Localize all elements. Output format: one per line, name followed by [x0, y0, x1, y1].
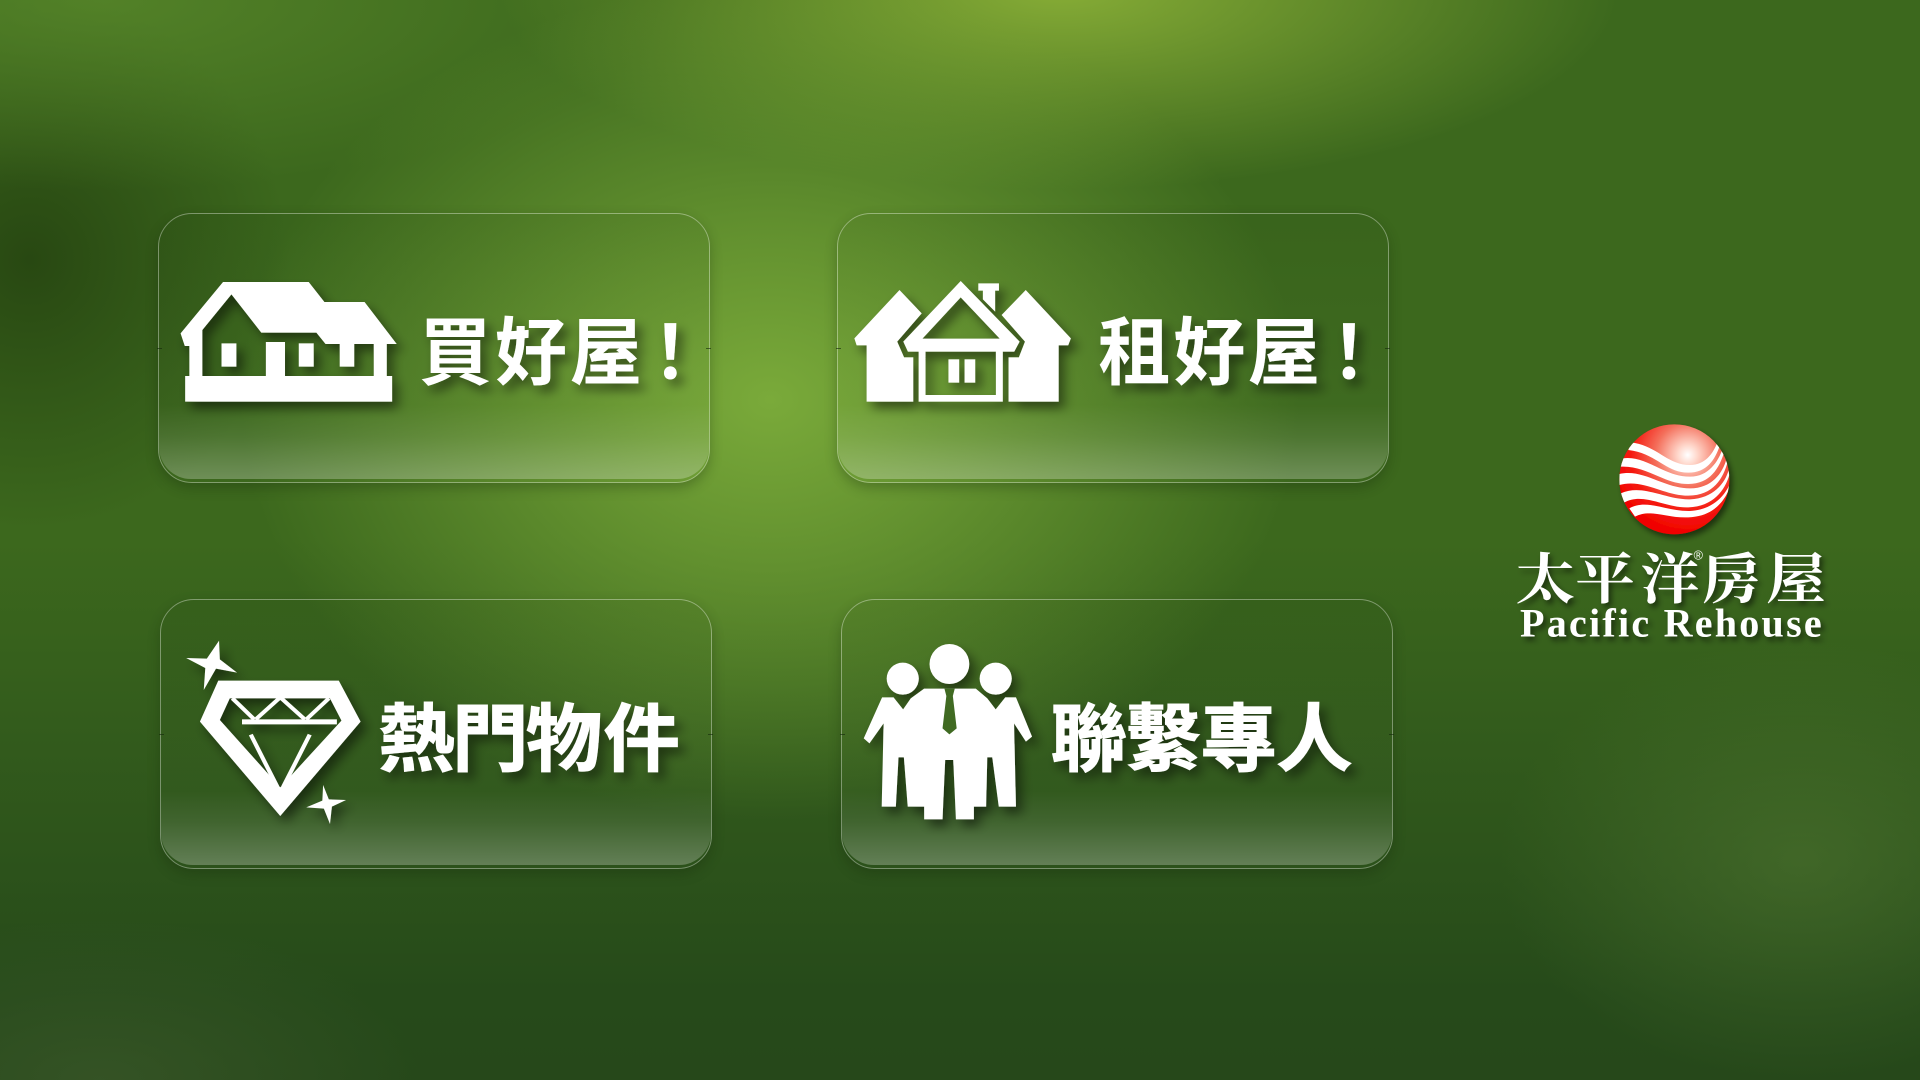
- logo: Pacific Rehouse: [1516, 424, 1827, 646]
- icon: three houses: [854, 280, 1071, 401]
- heading: 租好屋！: 租好屋！: [1098, 312, 1385, 394]
- icon: red wave sphere: [1619, 424, 1729, 534]
- panel: buy a good house: [158, 213, 710, 483]
- panel: hot listings: [160, 599, 712, 869]
- heading: 買好屋！: 買好屋！: [419, 312, 706, 394]
- heading: 熱門物件: 熱門物件: [378, 698, 680, 780]
- panel: contact an agent: [840, 599, 1392, 869]
- icon: diamond with sparkles: [186, 640, 361, 824]
- panel: rent a good house: [836, 213, 1388, 483]
- logo text: 太平洋房屋: 太平洋房屋: [1516, 550, 1826, 611]
- icon: house: [180, 282, 396, 401]
- logo text: Pacific Rehouse: Pacific Rehouse: [1520, 601, 1822, 646]
- registered mark: ®: [1694, 549, 1704, 563]
- heading: 聯繫專人: 聯繫專人: [1050, 698, 1353, 780]
- icon: three people: [864, 644, 1032, 819]
